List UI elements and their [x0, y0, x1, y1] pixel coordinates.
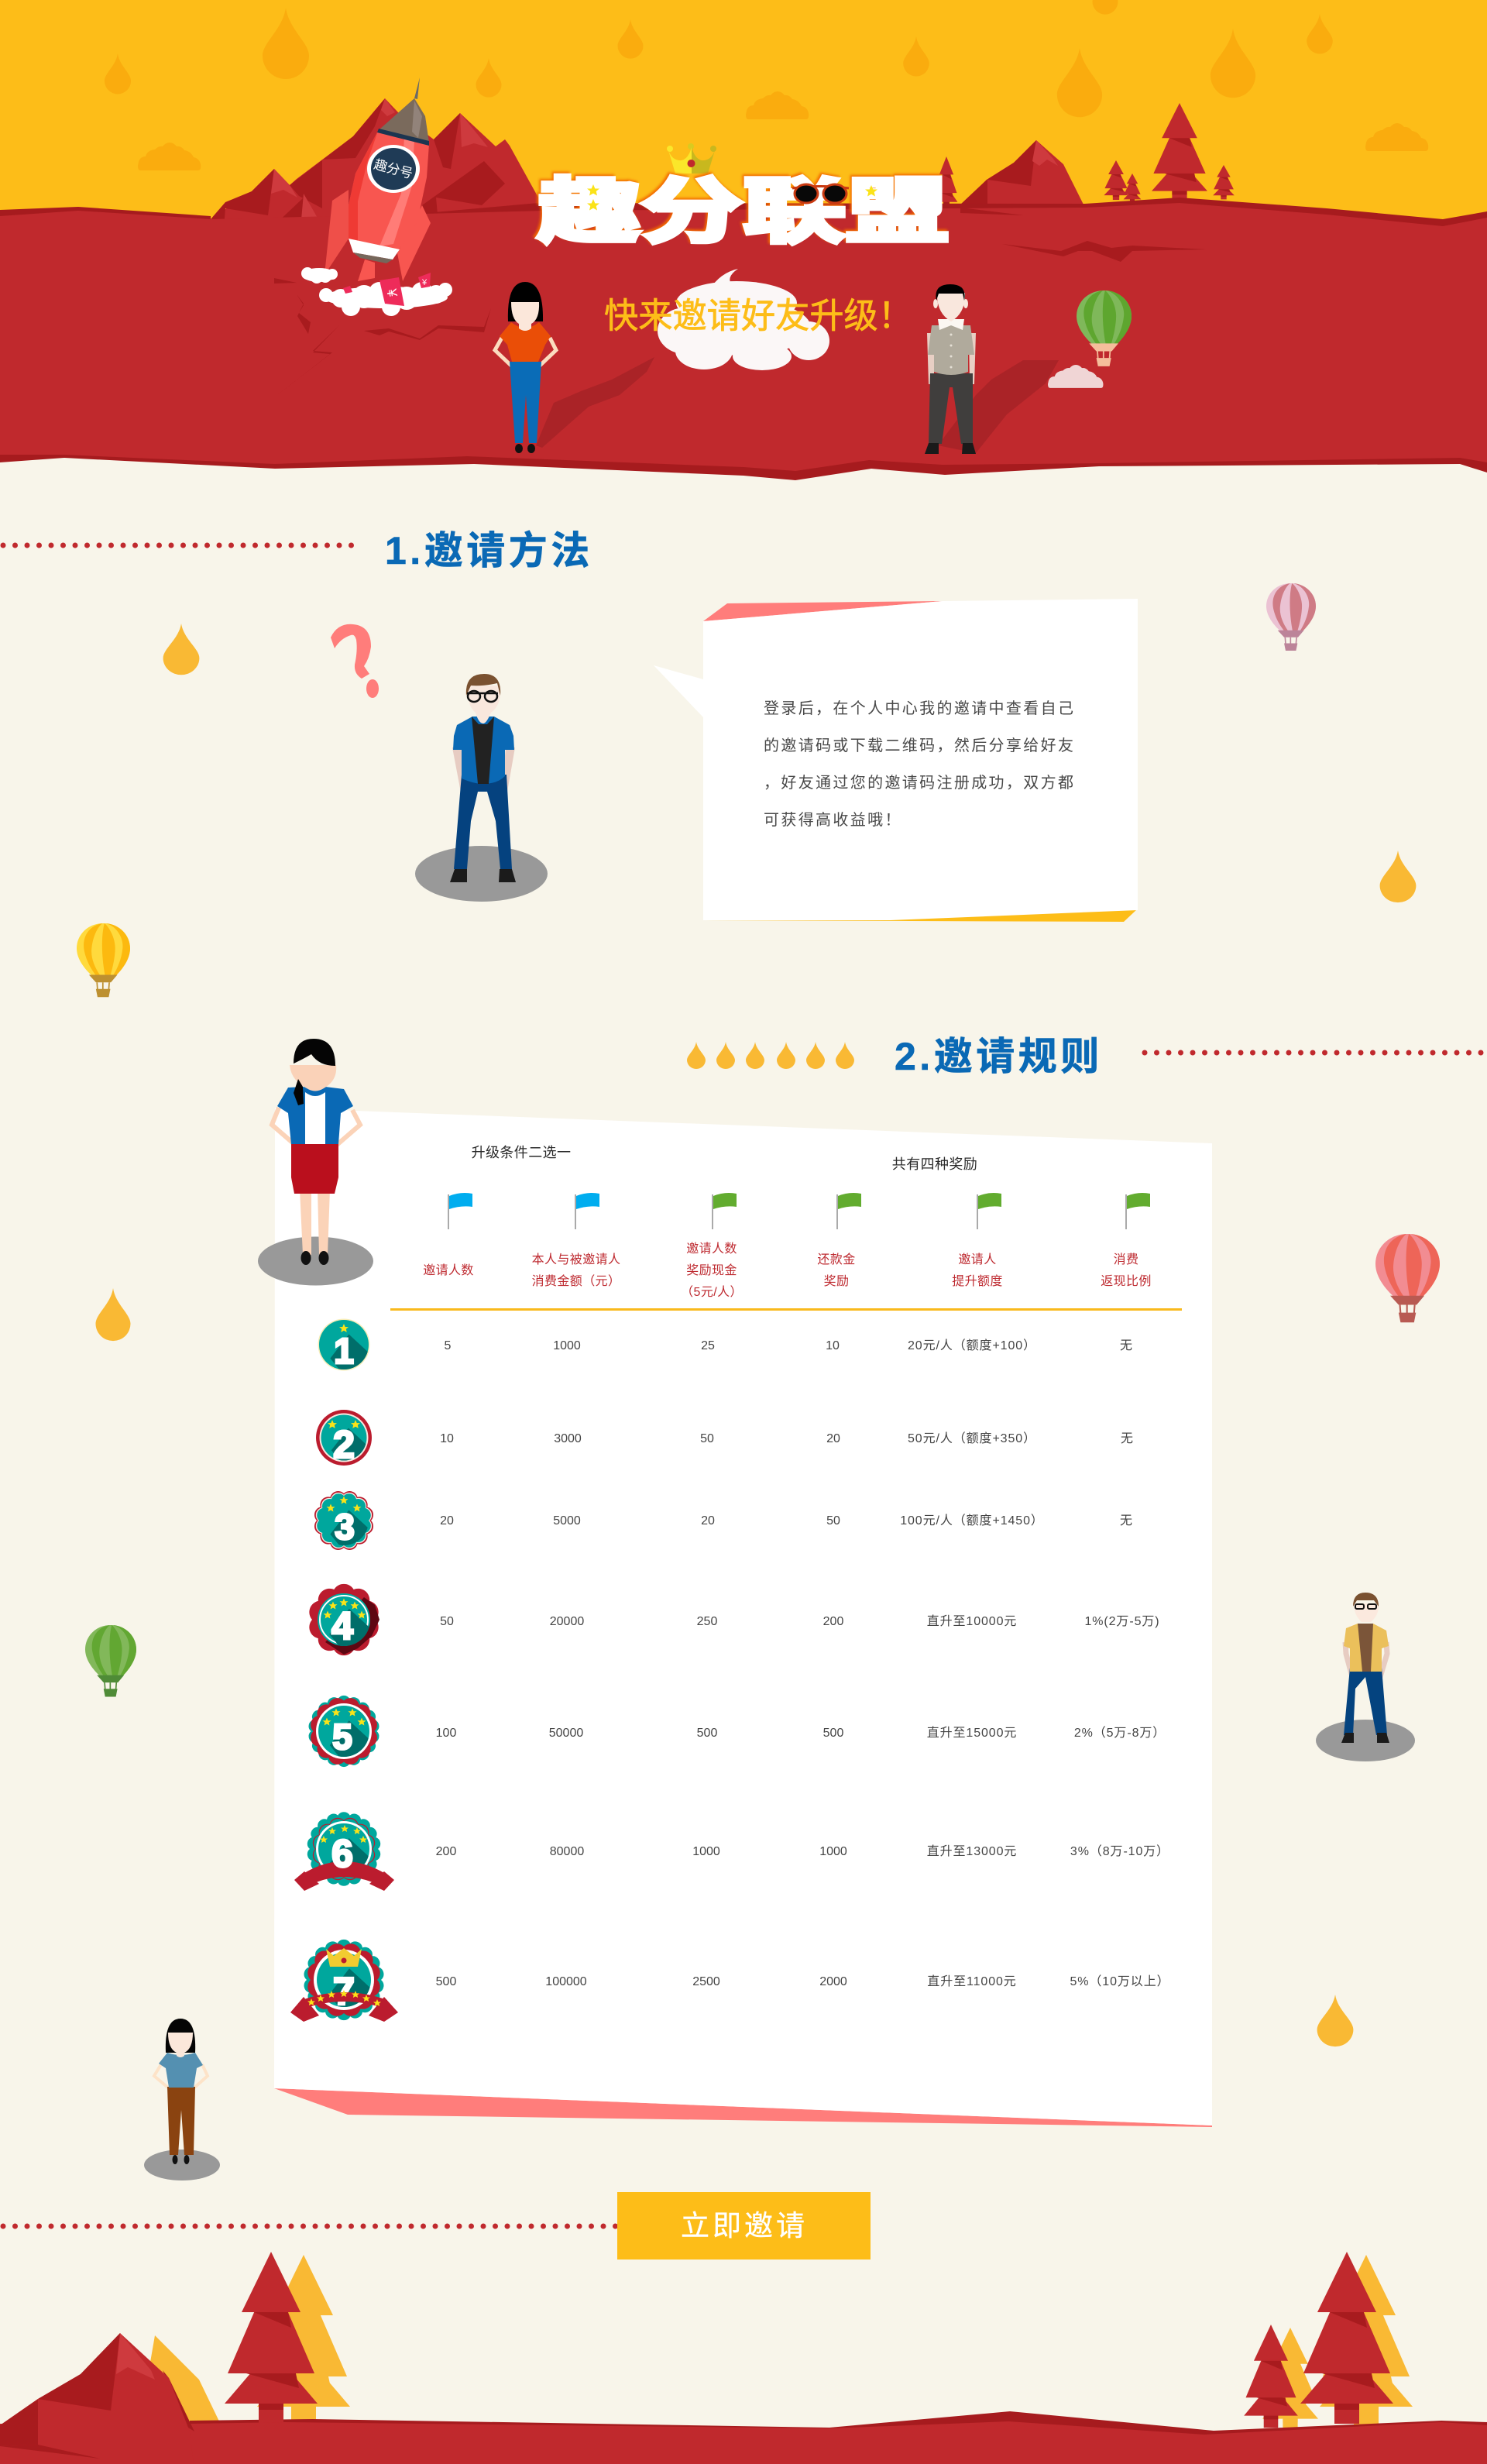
row 1: 10: [826, 1339, 840, 1352]
row 2: 50元/人（额度+350）: [908, 1431, 1036, 1445]
speech card: [654, 599, 1138, 922]
medal 2: [316, 1410, 372, 1466]
pale cloud: [1048, 365, 1103, 388]
row 2: 3000: [554, 1432, 582, 1445]
ground ellipse: [144, 2150, 220, 2180]
card yellow corner: [703, 909, 1137, 922]
row 4: 250: [697, 1615, 717, 1628]
row 3: 100元/人（额度+1450）: [900, 1514, 1044, 1528]
row 6: 200: [436, 1845, 456, 1858]
row 6: 3%（8万-10万）: [1070, 1844, 1169, 1858]
footer divider: [3, 2223, 617, 2229]
red balloon: [1375, 1234, 1440, 1322]
icon: drop right: [1380, 851, 1416, 902]
column labels: 奖励现金: [686, 1263, 737, 1277]
table card: [274, 1108, 1212, 2127]
row 5: [436, 1726, 1166, 1740]
icon: drop right low: [1317, 1995, 1353, 2046]
column labels: 还款金: [817, 1253, 856, 1266]
red trees: [225, 2252, 1393, 2428]
table pink edge: [274, 2088, 1212, 2127]
row 6: 1000: [819, 1845, 847, 1858]
row 2: 无: [1121, 1432, 1133, 1445]
row 4: 200: [823, 1615, 843, 1628]
invite button: [617, 2192, 871, 2260]
row 5: 2%（5万-8万）: [1074, 1726, 1166, 1740]
pink balloon: [1266, 583, 1316, 651]
yellow balloon: [77, 923, 130, 997]
card body: [654, 599, 1138, 920]
ground ellipse: [1316, 1720, 1415, 1761]
row 3: 20: [701, 1514, 715, 1528]
speech card: 的邀请码或下载二维码，然后分享给好友: [764, 737, 1075, 754]
flags: [448, 1193, 1150, 1229]
column labels: 消费金额（元）: [532, 1274, 620, 1288]
column labels: （5元/人）: [681, 1285, 743, 1299]
row 1: 5: [445, 1339, 452, 1352]
row 4: 1%(2万-5万): [1084, 1615, 1160, 1628]
medal 6: [294, 1812, 394, 1891]
column labels: 返现比例: [1101, 1274, 1152, 1288]
ground edge: [190, 2411, 1487, 2464]
row 7: 5%（10万以上）: [1070, 1974, 1170, 1988]
group heading: rewards: 共有四种奖励: [892, 1156, 977, 1172]
speech card: ，好友通过您的邀请码注册成功，双方都: [764, 774, 1075, 792]
speech card: 可获得高收益哦！: [764, 811, 902, 829]
icon: question mark: [331, 624, 379, 698]
row 2: 50: [700, 1432, 714, 1445]
title: 趣分联盟: [537, 173, 949, 252]
medal 5: [309, 1696, 379, 1767]
ground ellipse: [415, 846, 548, 902]
subtitle: 快来邀请好友升级！: [604, 296, 912, 335]
row 5: 50000: [549, 1727, 583, 1740]
row 4: [440, 1614, 1160, 1628]
medal 4: 4: [331, 1604, 353, 1648]
speech cloud: [658, 269, 829, 370]
green balloon left: [85, 1625, 136, 1696]
medal 3: 3: [335, 1507, 355, 1547]
medal 1: [318, 1318, 370, 1371]
row 1: [445, 1339, 1132, 1352]
icon: drop left mid: [96, 1288, 130, 1341]
column labels: [423, 1242, 1152, 1299]
medal 2: 2: [333, 1423, 355, 1466]
rocket: 趣分号: [373, 157, 414, 181]
header rule: [390, 1308, 1182, 1311]
man in blue jacket: [415, 674, 548, 902]
row 2: 20: [826, 1432, 840, 1445]
yellow back mountain: [139, 2335, 221, 2424]
column labels: 邀请人数: [423, 1263, 474, 1277]
row 6: 直升至13000元: [927, 1844, 1017, 1858]
rocket left fin: [325, 190, 349, 275]
medal 7: [290, 1940, 398, 2022]
title stars: [587, 184, 877, 210]
row 1: 20元/人（额度+100）: [908, 1339, 1036, 1352]
row 3: [440, 1514, 1132, 1528]
sky drops: [105, 0, 1333, 117]
figure shadows: [536, 357, 1059, 453]
header banner: [0, 0, 1487, 480]
crown: [667, 143, 716, 174]
red packets: ¥: [383, 287, 400, 299]
row 3: 5000: [553, 1514, 581, 1528]
woman in blue jacket: [258, 1039, 373, 1286]
invite button: 立即邀请: [681, 2210, 808, 2242]
row 7: 2500: [692, 1975, 720, 1988]
row 5: 100: [436, 1727, 456, 1740]
row 7: 100000: [545, 1975, 587, 1988]
heading: 2: 2.邀请规则: [895, 1035, 1103, 1078]
heading: 1: 1.邀请方法: [385, 529, 593, 572]
row 4: 50: [440, 1615, 454, 1628]
right mountain: [960, 140, 1085, 215]
row 7: 2000: [819, 1975, 847, 1988]
ground cracks: [274, 208, 1206, 395]
icon: drop left: [163, 624, 199, 675]
column labels: 奖励: [824, 1274, 849, 1288]
row 7: 500: [436, 1975, 456, 1988]
column labels: 提升额度: [952, 1274, 1003, 1288]
man in yellow vest: [1316, 1593, 1415, 1761]
column labels: 邀请人数: [686, 1242, 737, 1256]
red ground: [0, 198, 1487, 480]
green balloon: [1077, 290, 1132, 366]
yellow sky: [0, 0, 1487, 232]
man in grey: [925, 284, 976, 454]
card pink corner: [703, 601, 943, 621]
column labels: 邀请人: [958, 1253, 997, 1266]
medal 7: 7: [333, 1970, 355, 2013]
rocket body: [349, 131, 429, 251]
section 2 divider: [1145, 1050, 1487, 1055]
rocket right fin: [397, 205, 431, 281]
group heading: conditions: 升级条件二选一: [472, 1145, 571, 1160]
icon: sunglasses: [792, 184, 849, 203]
section 1 divider: [3, 542, 361, 548]
ground ellipse: [258, 1236, 373, 1286]
row 1: 25: [701, 1339, 715, 1352]
row 3: 50: [826, 1514, 840, 1528]
red packets: [343, 273, 431, 306]
red packets: ¥: [421, 278, 428, 287]
medal 1: 1: [334, 1331, 354, 1371]
medal 4: [309, 1584, 379, 1655]
left mountains: [208, 98, 545, 253]
row 5: 直升至15000元: [927, 1726, 1017, 1740]
row 3: 20: [440, 1514, 454, 1528]
row 6: [436, 1844, 1169, 1858]
medal 5: 5: [332, 1717, 352, 1757]
porthole: [367, 145, 420, 193]
row 4: 直升至10000元: [927, 1614, 1017, 1628]
row 7: 直升至11000元: [927, 1974, 1017, 1988]
row 2: [440, 1431, 1133, 1445]
row 1: 1000: [553, 1339, 581, 1352]
card text: 登录后，在个人中心我的邀请中查看自己: [764, 699, 1075, 717]
woman in orange: [495, 282, 556, 453]
row 5: 500: [823, 1727, 843, 1740]
column labels: 消费: [1114, 1253, 1138, 1266]
row 1: 无: [1120, 1339, 1132, 1352]
footer scene: [0, 2252, 1487, 2464]
woman in teal: [144, 2019, 220, 2180]
column labels: 本人与被邀请人: [532, 1253, 620, 1266]
row 2: 10: [440, 1432, 454, 1445]
medal 3: [314, 1491, 373, 1550]
row 7: [436, 1974, 1170, 1988]
row 4: 20000: [550, 1615, 584, 1628]
header trees: [936, 103, 1235, 208]
row 5: 500: [697, 1727, 717, 1740]
footer mountain: [0, 2333, 194, 2464]
row 6: 80000: [550, 1845, 584, 1858]
red ground: [0, 2421, 1487, 2464]
medal 6: 6: [331, 1832, 353, 1875]
row 3: 无: [1120, 1514, 1132, 1528]
launch clouds: [301, 267, 452, 316]
rocket: [325, 77, 431, 281]
sky clouds: [138, 91, 1428, 170]
table card body: [274, 1108, 1212, 2126]
row 6: 1000: [692, 1845, 720, 1858]
rocket nose: [379, 98, 429, 143]
section 2 drops: [687, 1042, 854, 1069]
yellow back trees: [257, 2255, 1413, 2431]
rocket nozzle ring: [349, 239, 400, 259]
